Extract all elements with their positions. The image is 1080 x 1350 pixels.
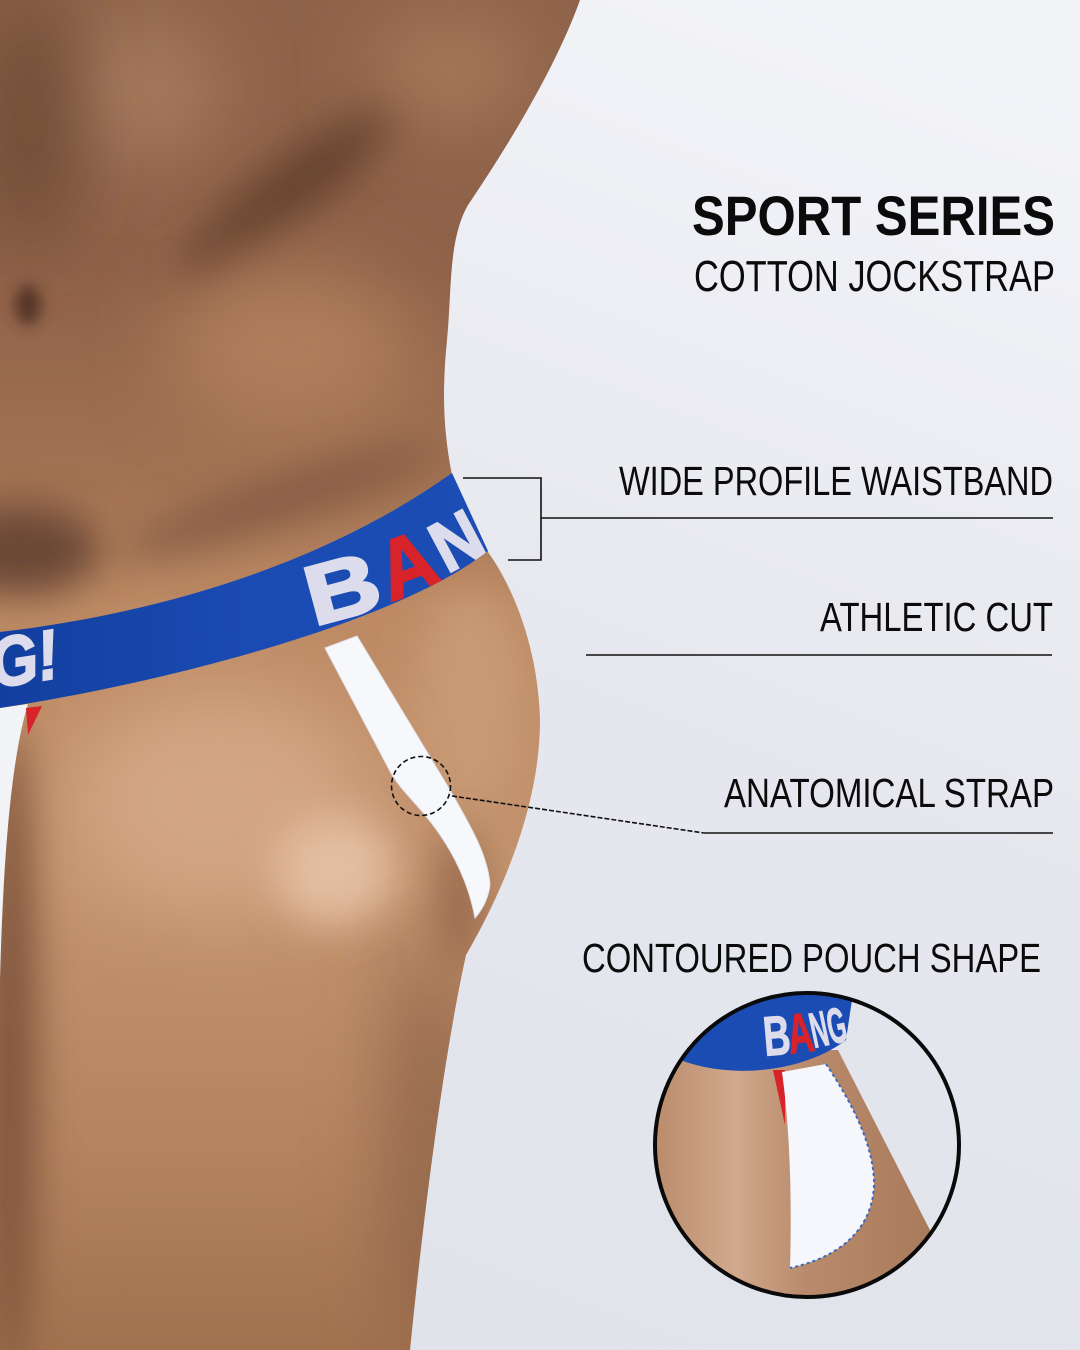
callout: anatomical strap <box>392 756 1054 833</box>
inset detail circle: B <box>761 1003 793 1068</box>
photo: torso and leg <box>0 0 580 1350</box>
inset detail circle: A <box>783 1000 817 1066</box>
inset detail circle <box>650 993 959 1310</box>
waistband logo: N <box>417 495 497 588</box>
waistband logo: B <box>294 533 390 643</box>
waistband logo: A <box>364 511 451 619</box>
waistband <box>0 473 497 708</box>
callout: wide profile waistband <box>463 458 1053 560</box>
white rear strap <box>325 636 490 918</box>
waistband logo <box>0 495 497 703</box>
pouch edge at left <box>0 704 42 980</box>
inset detail circle: NG <box>805 996 852 1059</box>
